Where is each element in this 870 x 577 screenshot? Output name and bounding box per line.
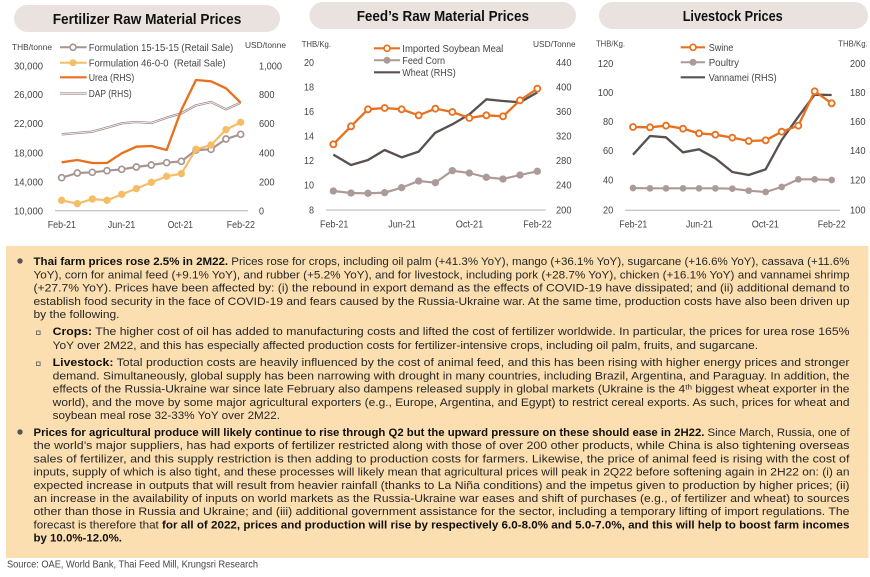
left axis labels: 60 [603,146,613,157]
x axis: Oct-21 [752,220,779,230]
text block: outlook: Prices for agricultural produce will likely continue to rise through Q2 but the upward pressure on these should ease in 2H22. Since March, Russia, one of [34,427,850,439]
legend: feed: Feed Corn [402,56,445,67]
left axis labels: 22,000 [14,119,43,130]
right axis labels: 600 [259,119,275,130]
left axis labels: 20 [603,206,613,217]
series: Feed Corn [330,167,541,197]
source note: Source: OAE, World Bank, Thai Feed Mill, Krungsri Research [7,560,258,570]
text block: Thai farm prices: Thai farm prices rose 2.5% in 2M22. Prices rose for crops, including oil palm (+41.3% YoY), mango (+36.1% YoY), sugarcane (+16.6% YoY), cassava (+11.6% [34,256,850,268]
left axis labels: 10,000 [14,207,43,218]
text block: Livestock [52,357,850,422]
left axis labels [596,38,625,217]
right axis labels [245,40,286,218]
series: Poultry [630,176,835,195]
right axis labels [533,39,576,217]
legend: fertilizer: Formulation 46-0-0 (Retail Sale) [89,58,226,70]
text block: Crops: Crops: The higher cost of oil has added to manufacturing costs and lifted the cost of fertilizer worldwide. In particular, the prices for urea rose 165% [53,326,850,338]
series: Swine [630,88,835,144]
x axis: Jun-21 [388,220,416,230]
sub-bullet icon: livestock [36,362,40,366]
left axis labels [302,39,331,217]
left axis labels: 40 [603,176,613,187]
sub-bullet icon: crops [36,331,40,335]
legend: livestock [681,43,777,84]
legend: fertilizer: Formulation 15-15-15 (Retail Sale) [89,43,233,54]
right axis labels: THB/Kg. [838,38,868,48]
legend: fertilizer [60,43,233,100]
text block: outlook: sales of fertilizer, and this supply restriction is then adding to production costs for farmers. Likewise, the price of animal feed is rising with the cost of [34,453,850,465]
x axis: Oct-21 [168,220,193,231]
right axis labels: 160 [850,117,866,128]
right axis labels: 200 [850,59,866,70]
left axis labels: 14 [304,132,314,143]
x axis: Jun-21 [108,220,135,231]
x axis: Feb-21 [619,220,647,230]
text block: outlook: inputs, supply of which is also tight, and these processes will likely mean that agricultural prices will peak in 2Q22 before softening again in 2H22 on: (i) an [34,467,850,479]
left axis labels: THB/Kg. [302,39,331,49]
series: Imported Soybean Meal [330,86,540,147]
x axis: Feb-22 [523,220,552,230]
text block: Crops [53,326,850,352]
legend: livestock: Poultry [709,58,740,69]
series: Formulation 15-15-15 [59,131,244,181]
heading: Feed's Raw Material Prices [310,2,576,29]
text block: Thai farm prices: (+27.7% YoY). Prices have been affected by: (i) the rebound in export demand as the effects of COVID-19 have dissipated; and (ii) additional demand to [34,283,850,295]
text block: Livestock: effects of the Russia-Ukraine war since late February also dampens released supply in global markets (Ukraine is the 4 [53,384,642,396]
left axis labels: 100 [598,88,613,99]
left axis labels: 10 [304,181,314,192]
right axis labels: 400 [556,83,572,94]
panel: livestock chart [596,2,868,230]
right axis labels: USD/Tonne [533,39,576,49]
text block: outlook: an increase in the availability of inputs on world markets as the Russia-Ukraine war eases and shift of purchases (e.g., of fertilizer and wheat) to sources [34,493,850,505]
right axis labels: 320 [556,132,572,143]
left axis labels: THB/Kg. [596,38,625,48]
heading: Fertilizer Raw Material Prices: Fertilizer Raw Material Prices [53,12,241,28]
left axis labels: 30,000 [14,62,43,73]
left axis labels: 80 [603,117,613,128]
x axis [48,211,255,231]
x axis [619,210,846,230]
right axis labels: 100 [850,206,866,217]
text block: Livestock: Livestock: Total production costs are heavily influenced by the cost of animal feed, and this has been rising with higher energy prices and stronger [53,357,850,369]
right axis labels: USD/tonne [245,40,286,50]
series: DAP [62,102,241,134]
right axis labels: 240 [556,181,572,192]
series: Vannamei [633,95,832,175]
text block: outlook: the world’s major suppliers, has had exports of fertilizer restricted along with those of over 200 other products, while China is also tightening overseas [34,440,850,452]
text block: outlook: expected increase in outputs that will result from heavier rainfall (thanks to La Niña conditions) and the impetus given to production by higher prices; (ii) [34,480,850,492]
x axis: Feb-21 [320,220,348,230]
text block: Livestock: soybean meal rose 32-33% YoY over 2M22. [53,410,280,422]
right axis labels: 280 [556,156,572,167]
series: Wheat [333,92,537,165]
text block: outlook: other than those in Russia and Ukraine; and (iii) additional government assistance for the sector, including a temporary lifting of import regulations. The [34,506,850,518]
legend: fertilizer: Urea (RHS) [89,73,134,84]
right axis labels: 400 [259,149,275,160]
legend: livestock: Swine [709,43,734,54]
left axis labels: 120 [598,59,613,70]
text block: Thai farm prices: YoY), corn for animal feed (+9.1% YoY), and rubber (+5.2% YoY), and for livestock, including pork (+28.7% YoY), chicken (+16.1% YoY) and vannamei shrimp [34,269,850,281]
text block: Livestock: biggest wheat exporter in the [692,384,850,396]
legend: fertilizer: DAP (RHS) [89,89,132,100]
x axis: Feb-22 [227,220,255,231]
x axis: Feb-21 [48,220,76,231]
left axis labels: 26,000 [14,90,43,101]
right axis labels: 200 [556,206,572,217]
text block: Thai farm prices [34,256,850,321]
right axis labels: 120 [850,176,866,187]
text block: outlook [34,427,850,545]
heading: Livestock Prices [599,2,868,29]
text block: outlook: by 10.0%-12.0%. [34,533,122,545]
bullet 2 icon [17,429,23,435]
right axis labels: 180 [850,88,866,99]
series: Urea [62,80,241,163]
right axis labels: 440 [556,58,572,69]
line chart: fertilizer series [58,80,244,207]
panel: feed chart [302,2,576,230]
line chart: feed series [330,86,541,197]
x axis: Jun-21 [686,220,713,230]
right axis labels: 360 [556,107,572,118]
right axis labels: 1,000 [259,62,282,73]
x axis: Oct-21 [456,220,483,230]
series: Formulation 46-0-0 [58,119,244,207]
heading: Fertilizer Raw Material Prices [14,5,280,32]
line chart: livestock series [630,88,835,195]
left axis labels: 16 [304,107,314,118]
bullet 1 icon [17,258,23,264]
text block: Thai farm prices: establish food security in the face of COVID-19 and fears caused by the Russia-Ukraine war. At the same time, production costs have also been driven up [34,296,850,308]
panel: commentary text [6,246,868,558]
left axis labels: 12 [304,156,314,167]
legend: livestock: Vannamei (RHS) [709,73,777,84]
text block: Livestock: demand. Simultaneously, global supply has been narrowing with drought in many countries, including Brazil, Argentina, and Paraguay. In addition, the [53,370,849,382]
right axis labels: 0 [259,207,264,218]
text block: Livestock: th [685,383,692,392]
left axis labels [12,42,52,218]
left axis labels: 8 [309,206,314,217]
x axis [320,210,552,230]
panel: fertilizer chart [12,5,286,231]
left axis labels: 14,000 [14,178,43,189]
x axis: Feb-22 [818,220,846,230]
right axis labels: 140 [850,146,866,157]
left axis labels: THB/tonne [12,42,52,52]
right axis labels: 200 [259,178,275,189]
legend: feed: Wheat (RHS) [402,68,456,79]
legend: feed: Imported Soybean Meal [402,44,503,55]
left axis labels: 18 [304,83,314,94]
heading: Livestock Prices: Livestock Prices [683,9,783,25]
left axis labels: 18,000 [14,149,43,160]
right axis labels: 800 [259,90,275,101]
heading: Feed's Raw Material Prices: Feed’s Raw Material Prices [357,9,529,25]
right axis labels [838,38,868,217]
text block: outlook: forecast is therefore that for all of 2022, prices and production will rise by respectively 6.0-8.0% and 5.0-7.0%, and this will help to boost farm incomes [34,519,850,531]
left axis labels: 20 [304,58,314,69]
legend: feed [374,44,503,79]
text block: Crops: YoY over 2M22, and this has especially affected production costs for fertilizer-intensive crops, including oil palm, fruits, and sugarcane. [53,340,758,352]
text block: Livestock: world), and the move by some major agricultural exporters (e.g., Europe, Argentina, and Egypt) to restrict cereal exports. As such, prices for wheat and [52,397,850,409]
text block: Thai farm prices: by the following. [34,309,120,321]
